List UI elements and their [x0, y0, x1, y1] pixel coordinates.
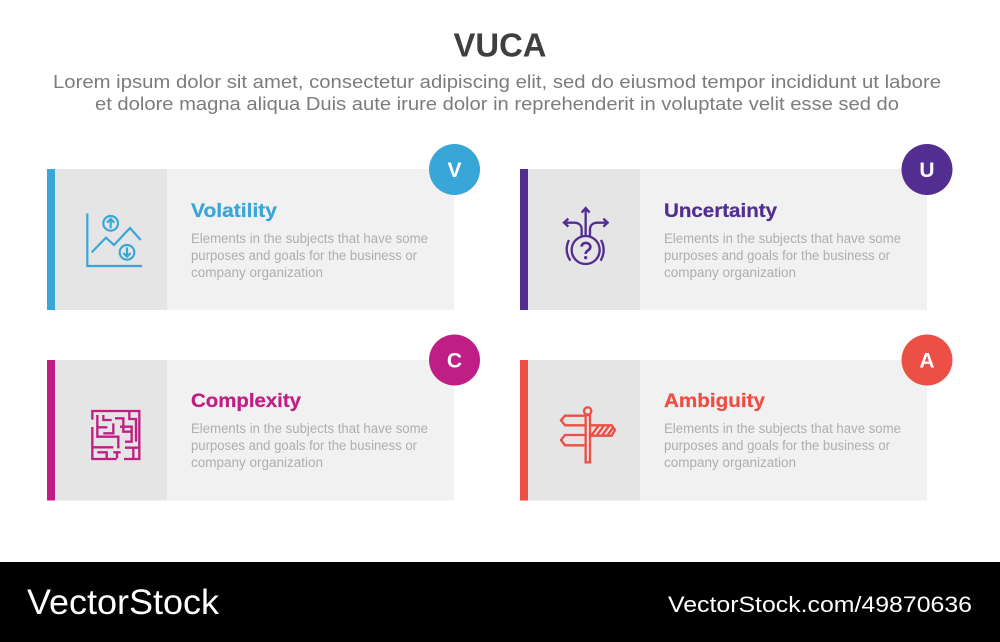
text: volatility: Elements in the subjects that have some: [191, 231, 428, 246]
badge: V: [429, 144, 480, 195]
icon: signpost: [561, 407, 615, 462]
text: ambiguity: [664, 421, 901, 470]
text: uncertainty: company organization: [664, 265, 796, 280]
subtitle: Lorem ipsum dolor sit amet, consectetur adipiscing elit, sed do eiusmod tempor incididunt ut labore: [53, 71, 941, 92]
icon: chart with up and down arrows: [87, 213, 142, 266]
badge: A: A: [919, 350, 935, 372]
panel: uncertainty: [520, 144, 952, 310]
text: ambiguity: Elements in the subjects that have some: [664, 421, 901, 436]
footer logo text: VectorStock: [27, 582, 219, 622]
heading: ambiguity: Ambiguity: [664, 390, 765, 412]
accent bar: uncertainty: [520, 169, 528, 310]
badge: U: [902, 144, 952, 195]
accent bar: volatility: [47, 169, 55, 310]
text: complexity: Elements in the subjects that have some: [191, 421, 428, 436]
heading: volatility: Volatility: [191, 200, 277, 222]
icon: question mark with three arrows: [564, 208, 608, 264]
text: volatility: purposes and goals for the business or: [191, 248, 417, 263]
text: uncertainty: Elements in the subjects that have some: [664, 231, 901, 246]
accent bar: complexity: [47, 360, 55, 500]
subtitle: [53, 71, 941, 114]
text: complexity: purposes and goals for the business or: [191, 438, 417, 453]
title: VUCA: [454, 28, 546, 64]
footer band: [0, 562, 1000, 642]
badge: V: V: [447, 159, 462, 182]
text: complexity: company organization: [191, 455, 323, 470]
text: complexity: [191, 421, 428, 470]
text: volatility: [191, 231, 428, 280]
badge: C: C: [447, 350, 462, 372]
footer url: VectorStock.com/49870636: [668, 592, 972, 617]
icon: maze: [92, 411, 139, 459]
text: ambiguity: purposes and goals for the business or: [664, 438, 890, 453]
badge: U: U: [919, 159, 935, 182]
badge: A: [902, 334, 952, 386]
panel: ambiguity: [520, 334, 952, 500]
badge: C: [429, 334, 480, 386]
text: uncertainty: [664, 231, 901, 280]
accent bar: ambiguity: [520, 360, 528, 500]
text: ambiguity: company organization: [664, 455, 796, 470]
heading: uncertainty: Uncertainty: [664, 200, 777, 222]
panel: volatility: [47, 144, 480, 310]
panel: complexity: [47, 334, 480, 500]
subtitle: et dolore magna aliqua Duis aute irure dolor in reprehenderit in voluptate velit esse sed do: [95, 93, 899, 114]
text: uncertainty: purposes and goals for the business or: [664, 248, 890, 263]
text: volatility: company organization: [191, 265, 323, 280]
heading: complexity: Complexity: [191, 390, 301, 412]
